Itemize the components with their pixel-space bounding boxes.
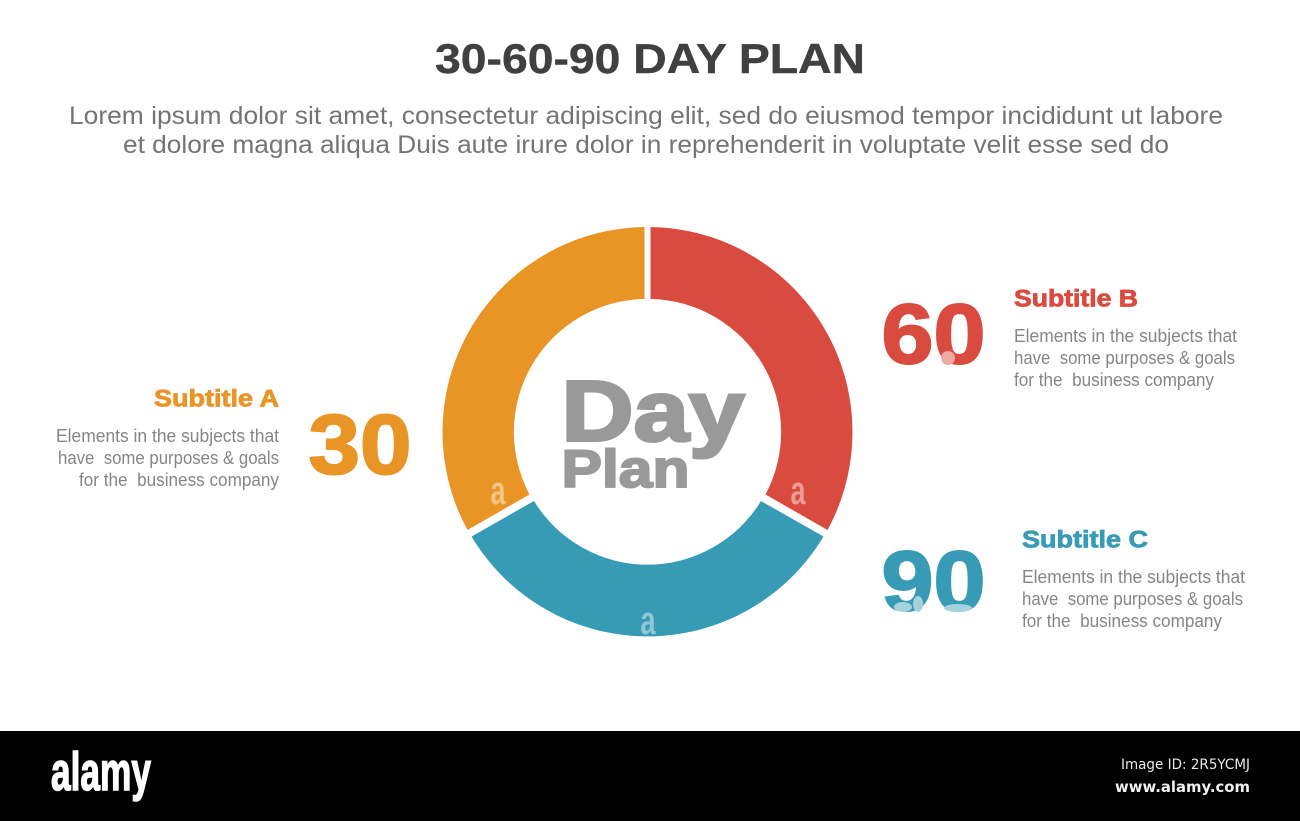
- heading A: Subtitle A: [154, 386, 279, 412]
- body B: [1014, 326, 1237, 390]
- watermark fragments: a: [640, 599, 656, 643]
- block: subtitle B: [882, 286, 1237, 390]
- segment: 90 days: [472, 501, 824, 636]
- segment: 60 days: [650, 227, 852, 530]
- body C: [1022, 567, 1245, 631]
- watermark fragments: a: [490, 469, 506, 513]
- body B: Elements in the subjects that: [1014, 326, 1237, 346]
- body B: have some purposes & goals: [1014, 348, 1235, 368]
- segment: 30 days: [443, 227, 644, 530]
- heading C: Subtitle C: [1022, 526, 1148, 554]
- center label: Day: [562, 364, 744, 460]
- image id: Image ID: 2R5YCMJ: [1121, 757, 1250, 773]
- center label: Plan: [562, 440, 690, 499]
- alamy logo: alamy: [51, 742, 151, 802]
- watermark fragments on 90: [894, 596, 972, 612]
- center label: [562, 364, 744, 499]
- body A: have some purposes & goals: [58, 448, 279, 468]
- footer bar: [0, 731, 1300, 821]
- body A: for the business company: [79, 470, 279, 490]
- website: www.alamy.com: [1115, 778, 1250, 796]
- watermark fragments: [490, 469, 806, 643]
- watermark fragments: a: [790, 469, 806, 513]
- body B: for the business company: [1014, 370, 1214, 390]
- body C: for the business company: [1022, 611, 1222, 631]
- body A: Elements in the subjects that: [56, 426, 279, 446]
- block: subtitle C: [882, 526, 1245, 631]
- body A: [56, 426, 279, 490]
- donut chart: [443, 227, 852, 643]
- intro text: et dolore magna aliqua Duis aute irure dolor in reprehenderit in voluptate velit esse sed do: [123, 131, 1169, 159]
- number 90: 90: [882, 534, 986, 628]
- title: 30-60-90 DAY PLAN: [435, 35, 865, 82]
- number 30: 30: [308, 398, 412, 492]
- body C: have some purposes & goals: [1022, 589, 1243, 609]
- intro text: Lorem ipsum dolor sit amet, consectetur adipiscing elit, sed do eiusmod tempor incididunt ut labore: [69, 102, 1223, 130]
- watermark fragment on 60: [941, 351, 955, 365]
- intro text: [69, 102, 1223, 159]
- heading B: Subtitle B: [1014, 286, 1138, 312]
- body C: Elements in the subjects that: [1022, 567, 1245, 587]
- number 60: 60: [882, 287, 986, 381]
- block: subtitle A: [56, 386, 412, 492]
